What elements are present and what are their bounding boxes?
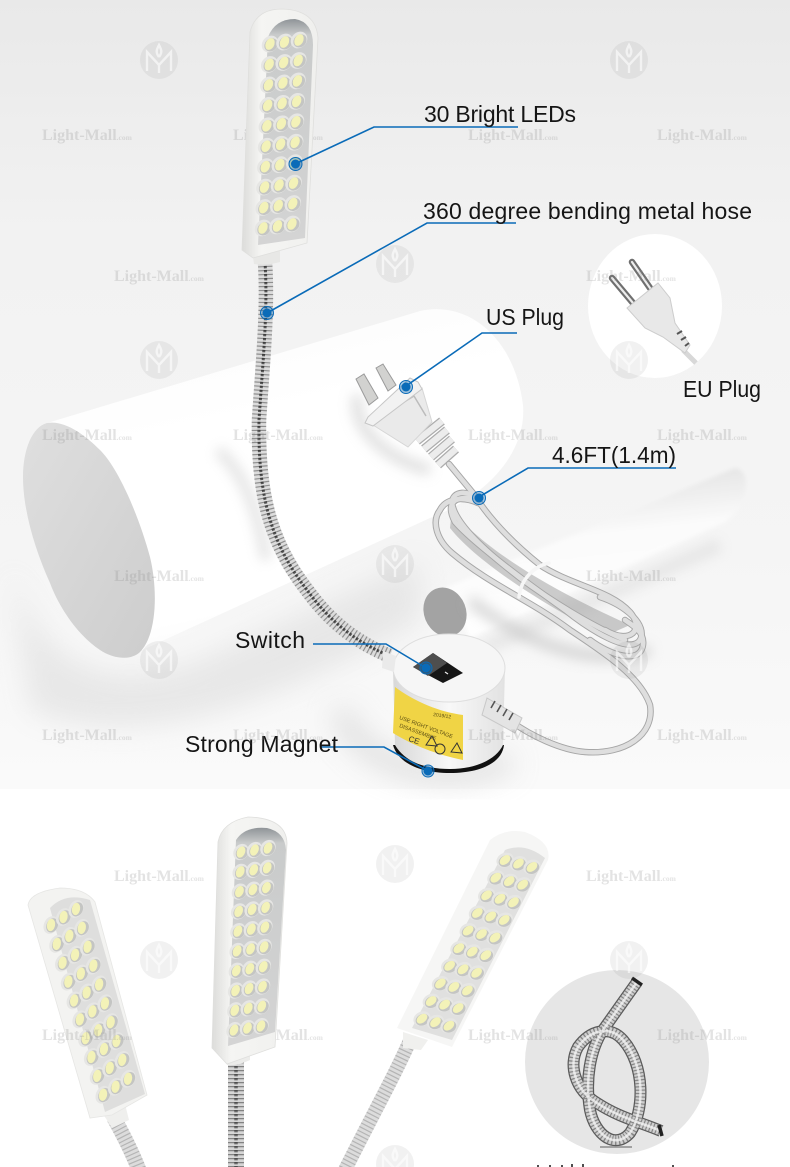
warning label: DISASSEMBLE — [398, 723, 437, 742]
hose collar — [382, 651, 396, 672]
callout: Strong Magnet: Strong Magnet — [185, 731, 339, 757]
left lamp LEDs — [42, 897, 138, 1107]
repeated Light-Mall text watermarks: Light-Mall.com — [657, 427, 748, 444]
small white cylinder — [416, 468, 746, 643]
floor shadow under large cylinder — [10, 560, 420, 727]
magnet ring — [393, 745, 504, 773]
EU plug cable — [683, 350, 696, 363]
base cap — [393, 634, 505, 702]
callout: Strong Magnet — [185, 731, 434, 777]
repeated Light-Mall text watermarks: Light-Mall.com — [114, 568, 205, 585]
callout: metal hose: 360 degree bending metal hose — [423, 198, 752, 224]
small cylinder end face — [416, 581, 474, 643]
left lamp collar — [103, 1104, 129, 1128]
cord grommet — [482, 698, 522, 733]
repeated Light-Mall text watermarks: Light-Mall.com — [114, 868, 205, 885]
repeated Light-Mall text watermarks: Light-Mall.com — [42, 127, 133, 144]
US plug — [356, 364, 456, 465]
centre lamp collar — [226, 1045, 250, 1065]
callout: metal hose — [260, 198, 752, 320]
30 LEDs — [254, 31, 308, 237]
callout: 30 Bright LEDs: 30 Bright LEDs — [424, 101, 576, 127]
plug strain relief — [417, 421, 456, 465]
shadow inside the bundle — [450, 510, 630, 636]
repeated Light-Mall text watermarks: Light-Mall.com — [233, 427, 324, 444]
shadow of hose on cylinder — [218, 450, 266, 560]
coiled power cord — [436, 464, 651, 752]
repeated Light-Mall text watermarks: Light-Mall.com — [468, 1027, 559, 1044]
EU plug inset circle — [588, 234, 722, 378]
right lamp housing — [397, 831, 549, 1047]
plug prongs — [356, 364, 396, 405]
callout: cord length — [472, 442, 676, 504]
EU Plug label: EU Plug — [683, 376, 761, 402]
watermarks behind the lamps: Light-Mall.com — [233, 1027, 324, 1044]
hose base shadow — [600, 1146, 632, 1148]
left lamp LED panel — [50, 897, 145, 1112]
watermarks behind the lamps: Light-Mall.com — [233, 127, 324, 144]
main lamp head — [242, 9, 318, 265]
repeated Light-Mall text watermarks: Light-Mall.com — [468, 427, 559, 444]
left lamp hose — [114, 1118, 139, 1167]
large white cylinder — [23, 309, 523, 658]
repeated Light-Mall text watermarks: Light-Mall.com — [586, 568, 677, 585]
switch base module — [382, 634, 522, 773]
EU plug pins — [612, 262, 650, 303]
lamp neck collar — [252, 246, 280, 265]
callout: Switch — [235, 627, 432, 674]
repeated Light-Mall text watermarks: Light-Mall.com — [42, 1027, 133, 1044]
centre lamp housing — [212, 817, 287, 1064]
lamp LED panel — [258, 19, 313, 245]
watermarks behind the lamps — [233, 127, 324, 1044]
plug body — [373, 388, 432, 447]
repeated Light-Mall text watermarks: Light-Mall.com — [42, 427, 133, 444]
callout: US Plug: US Plug — [486, 304, 564, 330]
cable tie — [519, 563, 549, 597]
centre lamp LED panel — [228, 828, 286, 1046]
right lamp LEDs — [411, 851, 543, 1035]
rocker switch — [413, 653, 463, 683]
repeated Light-Mall text watermarks: Light-Mall.com — [586, 268, 677, 285]
repeated Light-Mall text watermarks: Light-Mall.com — [468, 127, 559, 144]
warning label: CE — [407, 734, 421, 746]
repeated Light-Mall text watermarks — [42, 127, 748, 1044]
warning label: USE RIGHT VOLTAGE — [398, 715, 454, 740]
shadow under switch base — [340, 710, 510, 774]
repeated Light-Mall text watermarks: Light-Mall.com — [657, 127, 748, 144]
gooseneck hose main — [259, 262, 390, 656]
right lower lamp — [345, 831, 549, 1167]
repeated Light-Mall text watermarks: Light-Mall.com — [233, 727, 324, 744]
EU plug body — [627, 283, 690, 353]
repeated Light-Mall text watermarks: Light-Mall.com — [657, 1027, 748, 1044]
repeated Light-Mall text watermarks: Light-Mall.com — [586, 868, 677, 885]
right lamp collar — [403, 1032, 428, 1050]
right lamp LED panel — [412, 847, 545, 1040]
repeated Light-Mall text watermarks: Light-Mall.com — [468, 727, 559, 744]
centre lamp LEDs — [226, 839, 276, 1039]
centre lower lamp — [212, 817, 287, 1167]
right lamp hose — [345, 1036, 412, 1167]
warning label — [393, 687, 463, 760]
left lower lamp — [28, 888, 147, 1167]
base body — [393, 668, 505, 769]
callout lines and dots — [185, 101, 752, 777]
spare hose inset — [525, 970, 709, 1154]
callout: cord length: 4.6FT(1.4m) — [552, 442, 676, 468]
repeated watermark logos — [140, 41, 648, 1167]
callout: Switch: Switch — [235, 627, 305, 653]
repeated Light-Mall text watermarks: Light-Mall.com — [657, 727, 748, 744]
cylinder end face — [23, 423, 155, 658]
callout: 30 Bright LEDs — [289, 101, 576, 170]
EU plug grip — [677, 331, 689, 346]
repeated Light-Mall text watermarks: Light-Mall.com — [42, 727, 133, 744]
shadow under small cylinder — [480, 545, 720, 650]
bottom photo background — [0, 789, 790, 1167]
coiled metal hose — [574, 982, 661, 1140]
shadow under US plug — [357, 395, 430, 470]
clipped caption strokes at the bottom edge — [538, 1164, 673, 1167]
repeated Light-Mall text watermarks: Light-Mall.com — [114, 268, 205, 285]
callout: US Plug — [400, 304, 564, 394]
plug flange — [365, 378, 422, 426]
hose end caps — [632, 978, 662, 1136]
centre lamp hose — [228, 1058, 244, 1167]
shadow under coiled cord — [470, 600, 650, 656]
warning label: 2019/12 — [433, 712, 452, 721]
top photo background — [0, 0, 790, 789]
inset circle — [525, 970, 709, 1154]
lamp housing — [242, 9, 318, 258]
left lamp housing — [28, 888, 147, 1118]
